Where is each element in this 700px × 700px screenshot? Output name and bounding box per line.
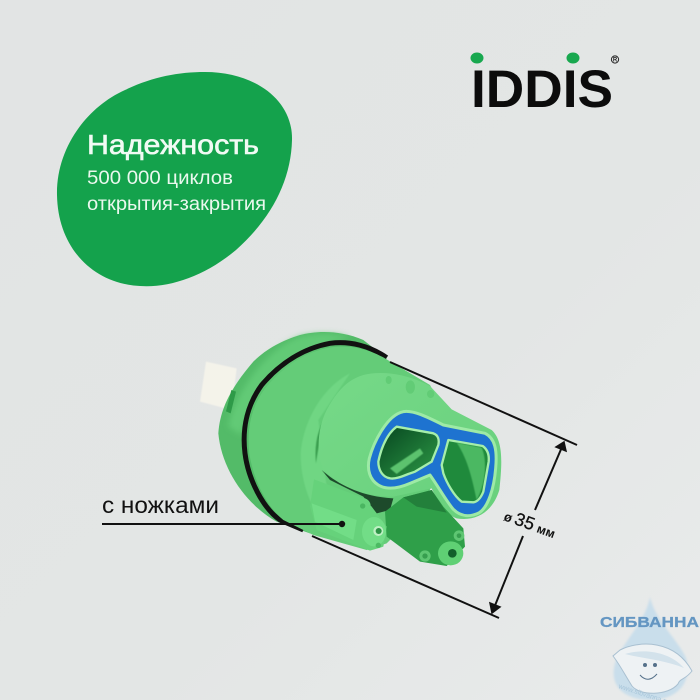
body [249, 347, 453, 550]
left prong [310, 479, 387, 551]
step shadow [316, 415, 327, 463]
IDDIS logo: IDDIS [471, 60, 613, 119]
right opening [442, 440, 489, 502]
label: with legs: с ножками [102, 492, 219, 518]
dimension lines [312, 362, 577, 618]
side clip [226, 390, 236, 413]
white stem [200, 362, 237, 410]
black ring [244, 343, 387, 530]
left opening ridge [390, 448, 423, 474]
left opening [378, 427, 439, 479]
rear highlight [228, 334, 350, 435]
nose [319, 373, 501, 519]
blue seal [368, 411, 496, 516]
body step highlight [301, 373, 350, 517]
green blob callout [57, 72, 292, 286]
dimension arrow: up [535, 442, 566, 510]
right prong [385, 490, 465, 566]
watermark: Sibvanna logo: СИБВАННА [600, 615, 700, 631]
photo: valve cartridge [200, 332, 501, 566]
label: with legs [102, 492, 345, 527]
callout text: 500 000 циклов [87, 168, 233, 189]
right opening wall [457, 443, 485, 500]
watermark: Sibvanna logo [600, 597, 700, 700]
dimension arrow: down [490, 536, 523, 613]
gap under nose [322, 470, 393, 513]
nose dimples [386, 376, 434, 398]
rear disc [218, 332, 387, 533]
IDDIS logo: R [613, 58, 618, 64]
callout heading: Надежность [87, 129, 259, 160]
diameter label: ø35мм [502, 505, 559, 542]
callout text: открытия-закрытия [87, 194, 266, 215]
